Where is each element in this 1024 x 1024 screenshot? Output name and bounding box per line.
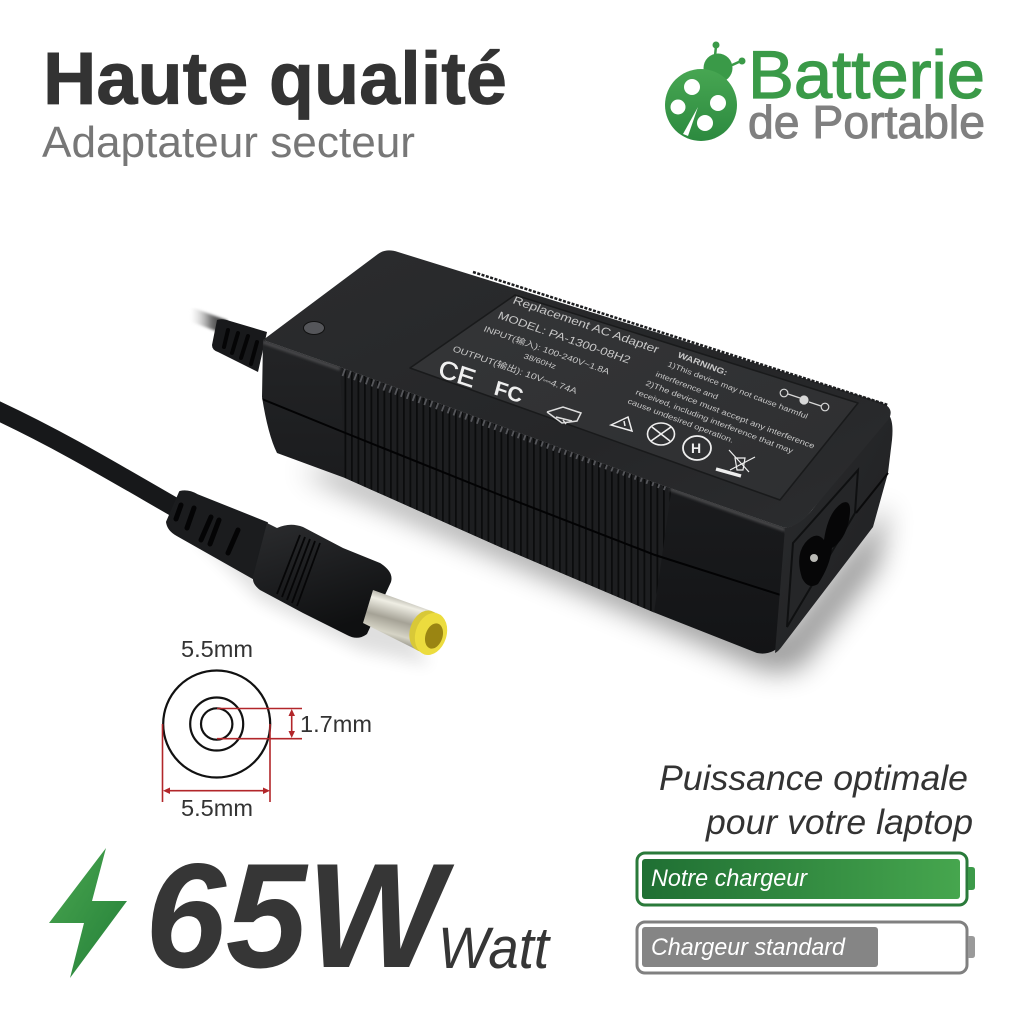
- adapter top face: [263, 250, 891, 528]
- connector diagram: [162, 636, 372, 821]
- icon: warning triangle: [611, 417, 632, 431]
- battery: our charger: [637, 853, 975, 905]
- plate text: OUTPUT(输出): 10V⎓4.74A: [451, 344, 580, 397]
- label: top diameter: 5.5mm: [181, 636, 253, 662]
- adapter front face: [775, 414, 892, 653]
- plate text: INPUT(输入): 100-240V~1.8A: [482, 324, 612, 376]
- logo: Batterie de Portable: [665, 37, 985, 148]
- plate text: MODEL: PA-1300-08H2: [496, 309, 633, 366]
- plate text: received, including interference that may: [634, 388, 796, 455]
- plate text: Replacement AC Adapter: [511, 294, 661, 356]
- plate text: 2)The device must accept any interference: [644, 379, 817, 450]
- icon: H circle: [683, 436, 711, 460]
- power heading: [659, 759, 973, 842]
- plate text: [451, 294, 817, 455]
- icon: lightning bolt: [49, 848, 127, 978]
- adapter photo: [0, 250, 892, 672]
- icon: house: [547, 407, 581, 424]
- label: pin diameter: 1.7mm: [300, 711, 372, 737]
- shadows: [190, 470, 888, 672]
- strain relief: [167, 491, 267, 578]
- icon: FCC mark: FC: [492, 376, 526, 408]
- power indicator LED: [304, 322, 324, 334]
- icon: H circle: H: [691, 440, 701, 456]
- plate text: 38/60Hz: [522, 352, 557, 371]
- metal pin: [363, 590, 437, 653]
- plug body: [253, 523, 392, 638]
- battery: standard charger: Chargeur standard: [651, 934, 846, 961]
- concentric circles: [163, 670, 270, 778]
- plate text: 1)This device may not cause harmful: [666, 360, 810, 421]
- wattage unit: Watt: [438, 916, 552, 981]
- wattage value: 65W: [145, 832, 455, 999]
- red dimension lines: [162, 708, 302, 802]
- back cable: [190, 314, 267, 372]
- socket recess: [787, 470, 858, 627]
- icon: ladybug: [665, 42, 746, 141]
- power heading: pour votre laptop: [705, 803, 973, 842]
- title: Haute qualité: [43, 37, 507, 120]
- barrel plug: [167, 491, 452, 659]
- icon: polarity: [780, 389, 829, 411]
- plate text: cause undesired operation.: [626, 397, 735, 445]
- subtitle: Adaptateur secteur: [42, 118, 415, 167]
- label plate: [410, 294, 858, 500]
- logo words: de Portable: de Portable: [748, 96, 985, 148]
- icon: crossed circle: [648, 423, 674, 445]
- adapter side face: [262, 340, 787, 654]
- plate text: WARNING:: [676, 351, 729, 377]
- power socket: [799, 502, 850, 586]
- yellow tip: [404, 606, 452, 659]
- icon: CE mark: CE: [435, 354, 479, 393]
- logo word: Batterie: Batterie: [748, 37, 985, 113]
- plate text: interference and: [654, 370, 720, 401]
- battery: standard charger: [637, 922, 975, 973]
- front cable: [0, 410, 176, 508]
- label: bottom diameter: 5.5mm: [181, 795, 253, 821]
- power heading: Puissance optimale: [659, 759, 968, 798]
- plug grooves: [277, 535, 320, 606]
- icon: crossed bin: [716, 450, 755, 476]
- battery: our charger: Notre chargeur: [651, 865, 808, 892]
